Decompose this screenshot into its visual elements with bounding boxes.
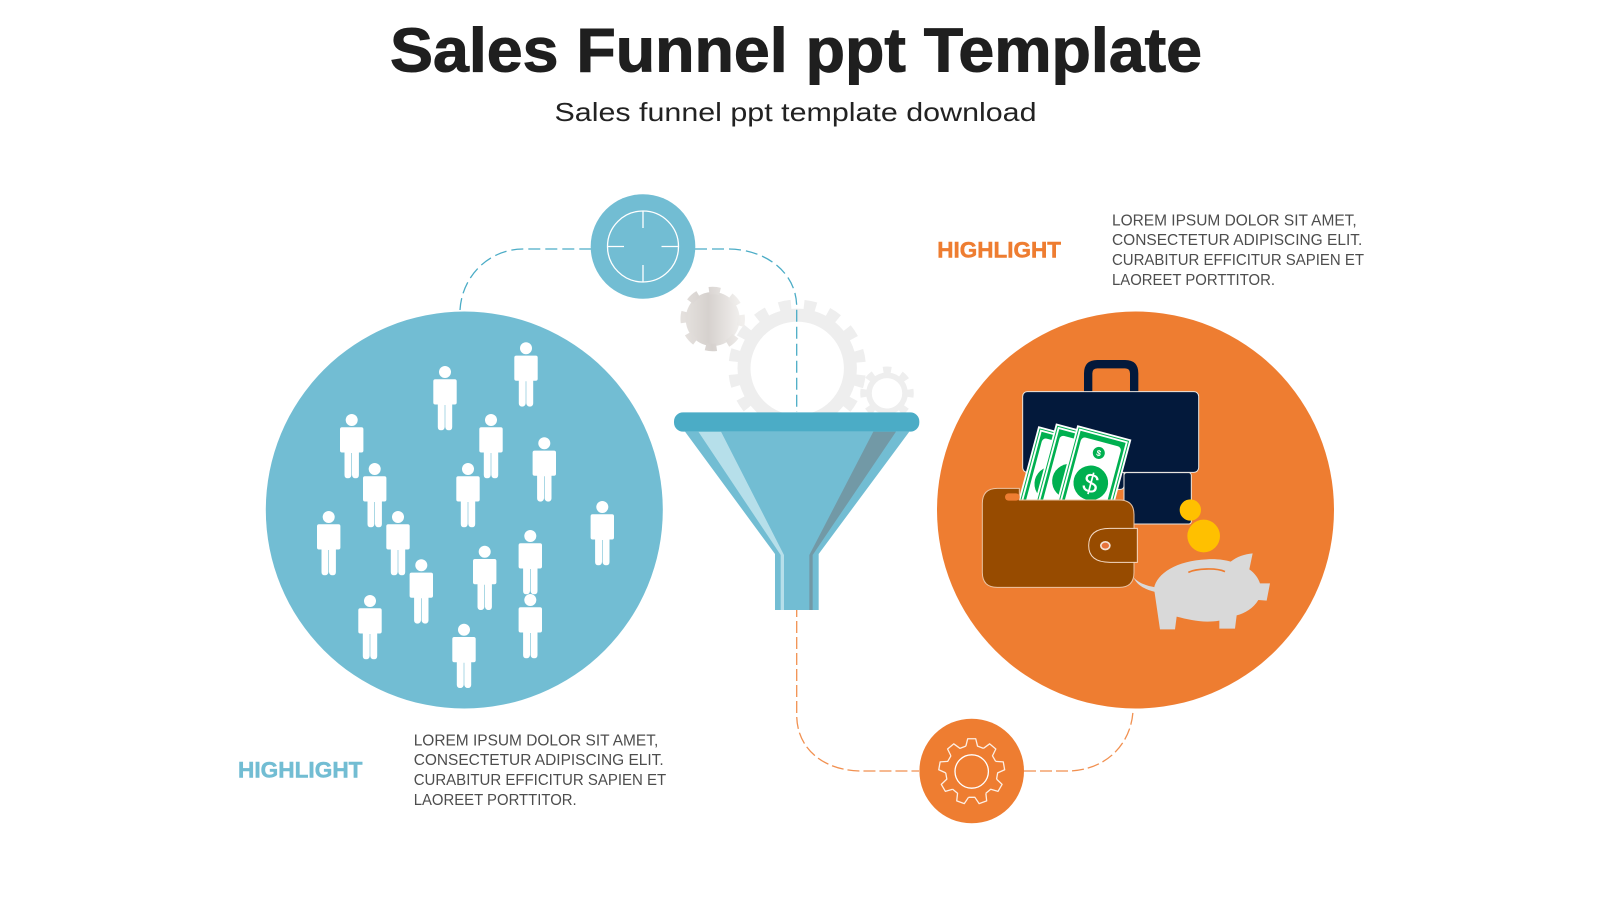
title: Sales Funnel ppt Template bbox=[390, 16, 1202, 86]
text block: right description: LAOREET PORTTITOR. bbox=[1112, 272, 1275, 289]
funnel body bbox=[685, 432, 909, 610]
dashed connector: target to funnel bbox=[695, 249, 797, 412]
icon: front banknote bbox=[1051, 425, 1131, 538]
illustration: money icons bbox=[982, 360, 1270, 629]
subtitle: Sales funnel ppt template download bbox=[554, 97, 1036, 127]
icon: large pale gear bbox=[729, 300, 866, 412]
icon: left banknote bbox=[1012, 426, 1092, 539]
icon: piggy bank bbox=[1133, 553, 1270, 629]
funnel highlight bbox=[698, 432, 784, 610]
text block: left description: LAOREET PORTTITOR. bbox=[414, 792, 577, 809]
funnel bbox=[674, 412, 919, 610]
heading: left highlight: HIGHLIGHT bbox=[238, 757, 363, 782]
text block: left description bbox=[414, 732, 667, 809]
icon: coins bbox=[1180, 499, 1220, 552]
text block: right description: CONSECTETUR ADIPISCING ELIT. bbox=[1112, 232, 1362, 249]
icon: gear circle bbox=[919, 719, 1024, 823]
text block: right description: CURABITUR EFFICITUR SAPIEN ET bbox=[1112, 252, 1365, 269]
infographic canvas bbox=[239, 26, 1364, 824]
panel: money circle bbox=[937, 312, 1334, 708]
icon: middle banknote bbox=[1029, 423, 1110, 537]
text block: left description: CURABITUR EFFICITUR SAPIEN ET bbox=[414, 772, 667, 789]
text block: right description: LOREM IPSUM DOLOR SIT AMET, bbox=[1112, 212, 1357, 229]
icons: people crowd bbox=[317, 342, 614, 688]
icon: front banknote: $ bbox=[1079, 466, 1102, 500]
icon: wallet bbox=[982, 488, 1137, 587]
dashed connector: audience to target bbox=[460, 249, 591, 310]
funnel shadow bbox=[809, 432, 896, 610]
icon: target circle bbox=[591, 194, 695, 299]
text block: left description: LOREM IPSUM DOLOR SIT AMET, bbox=[414, 732, 658, 749]
panel: audience circle bbox=[266, 312, 663, 708]
icon: front banknote: $ bbox=[1095, 448, 1103, 458]
dashed connector: funnel to gear bbox=[797, 605, 919, 771]
funnel rim bbox=[674, 412, 919, 432]
text block: right description bbox=[1112, 212, 1365, 289]
dashed connector: gear to money bbox=[1024, 711, 1133, 771]
icon: grey gear bbox=[681, 287, 745, 351]
icon: small pale gear bbox=[860, 366, 914, 412]
text block: left description: CONSECTETUR ADIPISCING ELIT. bbox=[414, 752, 664, 769]
gears behind funnel bbox=[680, 286, 914, 412]
icon: briefcase bbox=[1023, 360, 1199, 524]
heading: right highlight: HIGHLIGHT bbox=[937, 237, 1062, 262]
